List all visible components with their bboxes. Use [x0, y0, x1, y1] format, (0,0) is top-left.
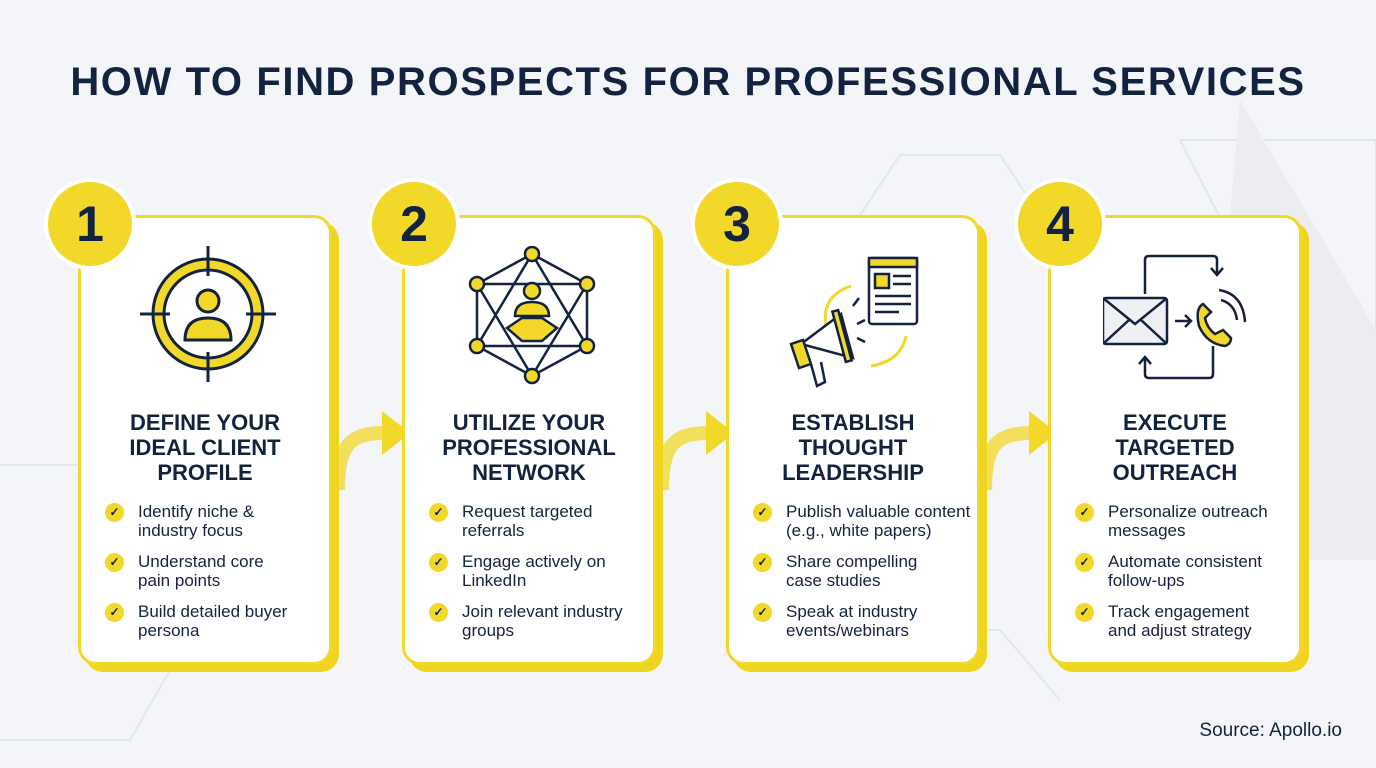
- badge 2: 2: [400, 196, 428, 252]
- bullets: Identify niche &: [138, 502, 254, 521]
- bullets: messages: [1108, 521, 1185, 540]
- bullets: Publish valuable content: [786, 502, 970, 521]
- badge 2: [368, 178, 460, 270]
- heading: [782, 410, 924, 485]
- bullets: LinkedIn: [462, 571, 526, 590]
- badge 3: 3: [723, 196, 751, 252]
- bullets: groups: [462, 621, 514, 640]
- badge 3: [691, 178, 783, 270]
- bullets: Engage actively on: [462, 552, 606, 571]
- heading: PROFESSIONAL: [442, 435, 616, 460]
- heading: [442, 410, 616, 485]
- bullets: events/webinars: [786, 621, 909, 640]
- bullets: referrals: [462, 521, 524, 540]
- heading: THOUGHT: [799, 435, 907, 460]
- bullets: [753, 502, 970, 640]
- bullets: industry focus: [138, 521, 243, 540]
- badge 4: [1014, 178, 1106, 270]
- heading: IDEAL CLIENT: [129, 435, 281, 460]
- bullets: (e.g., white papers): [786, 521, 932, 540]
- bullets: Join relevant industry: [462, 602, 623, 621]
- heading: OUTREACH: [1113, 460, 1237, 485]
- bullets: persona: [138, 621, 199, 640]
- bullets: [105, 502, 287, 640]
- heading: LEADERSHIP: [782, 460, 924, 485]
- bullets: Request targeted: [462, 502, 592, 521]
- panel: step 1: [78, 215, 332, 665]
- bullets: and adjust strategy: [1108, 621, 1252, 640]
- heading: [1113, 410, 1237, 485]
- bullets: pain points: [138, 571, 220, 590]
- heading: ESTABLISH: [791, 410, 915, 435]
- icon: network: [468, 246, 596, 384]
- badge 1: 1: [76, 196, 104, 252]
- icon: email to phone cycle: [1103, 254, 1246, 380]
- panel: step 4: [1048, 215, 1302, 665]
- heading: EXECUTE: [1123, 410, 1227, 435]
- arrow 3-4: [987, 411, 1048, 490]
- arrow 1-2: [339, 411, 402, 490]
- arrow 2-3: [663, 411, 726, 490]
- source: Source: Apollo.io: [1199, 720, 1342, 741]
- heading: DEFINE YOUR: [130, 410, 280, 435]
- badge 1: [44, 178, 136, 270]
- icon: megaphone and article: [789, 256, 918, 388]
- heading: [129, 410, 281, 485]
- heading: UTILIZE YOUR: [453, 410, 605, 435]
- title: HOW TO FIND PROSPECTS FOR PROFESSIONAL SERVICES: [70, 60, 1306, 104]
- bullets: Speak at industry: [786, 602, 917, 621]
- bullets: Share compelling: [786, 552, 917, 571]
- panel: step 3: [726, 215, 980, 665]
- icon: target person: [140, 246, 276, 382]
- bullets: [1075, 502, 1268, 640]
- bullets: Understand core: [138, 552, 264, 571]
- heading: NETWORK: [472, 460, 586, 485]
- bullets: Track engagement: [1108, 602, 1249, 621]
- bullets: case studies: [786, 571, 880, 590]
- bullets: Build detailed buyer: [138, 602, 287, 621]
- bullets: [429, 502, 623, 640]
- heading: PROFILE: [157, 460, 253, 485]
- heading: TARGETED: [1115, 435, 1235, 460]
- bullets: Automate consistent: [1108, 552, 1262, 571]
- panel: step 2: [402, 215, 656, 665]
- bullets: follow-ups: [1108, 571, 1185, 590]
- bullets: Personalize outreach: [1108, 502, 1268, 521]
- badge 4: 4: [1046, 196, 1074, 252]
